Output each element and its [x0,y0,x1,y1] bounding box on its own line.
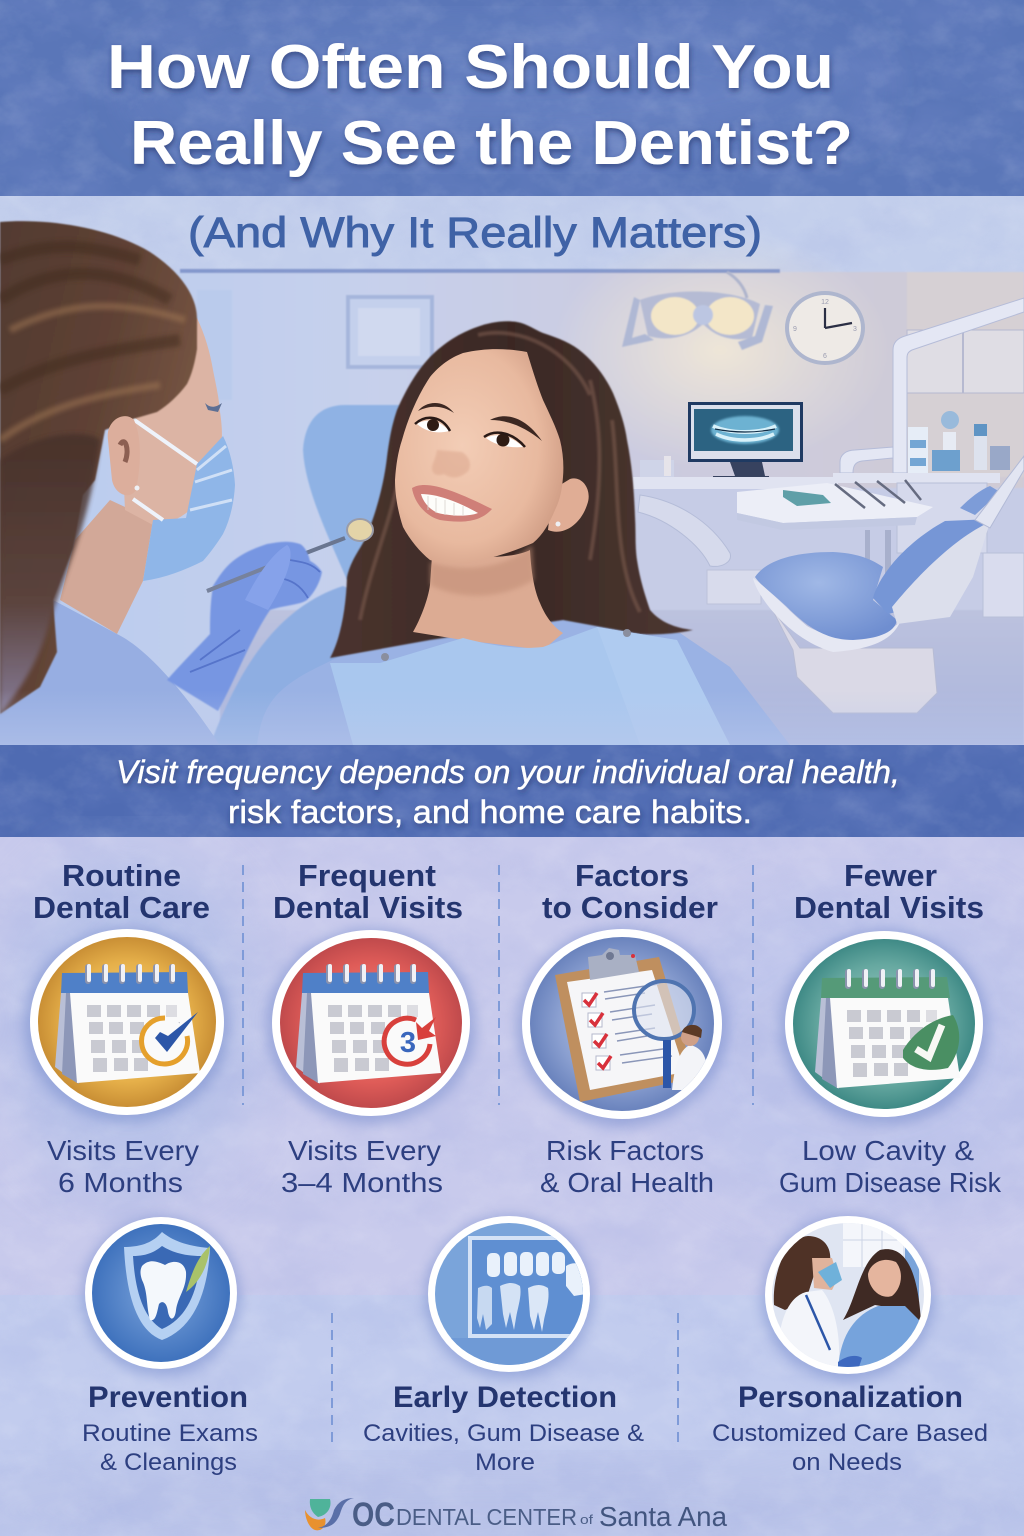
panel: factors to consider [516,858,728,1198]
heading: factors to consider: to Consider [542,890,718,925]
heading: factors to consider [542,858,718,925]
title [107,33,853,178]
hero illustration: dental office scene [0,221,1024,745]
title: How Often Should You [107,33,834,102]
heading: frequent dental visits [273,858,463,925]
patient: gown [257,617,790,745]
text: risk factors and oral health: Risk Factors [546,1135,704,1166]
text: personalization: on Needs [792,1449,902,1476]
icon: calendar with 3 and arrow: 3 [400,1027,416,1059]
panel: prevention [81,1216,258,1476]
text: personalization [712,1381,988,1476]
heading: fewer dental visits: Dental Visits [794,890,984,925]
monitor with x-ray [688,402,803,479]
room background [0,230,1024,745]
text: early detection: More [475,1449,535,1476]
heading: routine dental care [33,858,210,925]
text: visits every 6 months: 6 Months [58,1167,183,1198]
icon: calendar with check [24,927,230,1123]
heading: factors to consider: Factors [575,858,689,893]
bottom haze [0,690,1024,745]
dentist: ear [108,416,140,495]
dentist: face and mask [120,318,235,581]
dental chair [753,456,1024,713]
text: early detection [363,1381,644,1476]
heading: frequent dental visits: Dental Visits [273,890,463,925]
overhead dental lamp [622,272,773,350]
text: visits every 3-4 months: 3–4 Months [281,1167,443,1198]
icon: logo swirl [305,1498,354,1530]
text: low cavity and gum disease risk: Low Cavity & [802,1135,974,1166]
text: prevention [82,1381,258,1476]
summary band text: Visit frequency depends on your individual oral health, [116,754,900,790]
icon: dentist with patient [761,1215,935,1381]
patient: bib [330,627,730,745]
chair arm [638,495,761,604]
text: visits every 3-4 months: Visits Every [288,1135,441,1166]
instrument tray [737,479,932,574]
text: prevention: Prevention [88,1381,248,1414]
footer logo: Santa Ana [599,1501,727,1532]
heading: routine dental care: Routine [62,858,181,893]
wall clock: 3 [853,326,857,333]
upper cabinets [907,330,1024,393]
text: prevention: Routine Exams [82,1420,258,1447]
text: prevention: & Cleanings [100,1449,237,1476]
text: risk factors and oral health: & Oral Health [540,1167,714,1198]
counter and supplies [633,411,1024,617]
footer logo: OC [352,1496,395,1534]
icon: clipboard and magnifier [516,927,728,1127]
title: Really See the Dentist? [130,109,853,178]
text: visits every 6 months: Visits Every [47,1135,199,1166]
icon: calendar with 3 and arrow [266,928,476,1124]
text: personalization: Customized Care Based [712,1420,988,1447]
wall clock [785,291,865,365]
heading: fewer dental visits [794,858,984,925]
heading: routine dental care: Dental Care [33,890,210,925]
patient: hair [330,321,693,658]
text: visits every 3-4 months [281,1135,443,1198]
patient headrest [210,405,410,745]
patient: face [395,349,589,563]
heading: frequent dental visits: Frequent [298,858,436,893]
summary band text [116,754,900,830]
panel: early detection [363,1215,644,1476]
panel: frequent dental visits [266,858,476,1198]
dentist: mirror and glove [167,519,373,711]
wall clock: 6 [823,353,827,360]
text: personalization: Personalization [738,1381,963,1414]
text: early detection: Cavities, Gum Disease & [363,1420,644,1447]
patient: neck [413,545,563,650]
footer logo: of [580,1512,593,1527]
footer logo: DENTAL CENTER [396,1504,577,1530]
wall clock: 12 [821,299,829,306]
icon: dental x-ray [424,1215,594,1379]
dentist: hair [0,221,197,714]
panel: fewer dental visits [779,858,1002,1198]
wall clock: 9 [793,326,797,333]
text: low cavity and gum disease risk [779,1135,1002,1198]
summary band text: risk factors, and home care habits. [228,794,752,830]
dental arm and pipes [840,298,1024,473]
text: visits every 6 months [47,1135,199,1198]
text: low cavity and gum disease risk: Gum Disease Risk [779,1167,1002,1198]
subtitle: (And Why It Really Matters) [188,209,762,257]
dentist: scrubs and neck [0,500,220,745]
icon: shield with tooth [81,1216,241,1376]
panel: routine dental care [24,858,230,1198]
footer logo [305,1496,727,1534]
icon: calendar with green check [779,929,989,1125]
panel: personalization [712,1215,988,1476]
text: risk factors and oral health [540,1135,714,1198]
text: early detection: Early Detection [393,1381,617,1414]
heading: fewer dental visits: Fewer [844,858,937,893]
